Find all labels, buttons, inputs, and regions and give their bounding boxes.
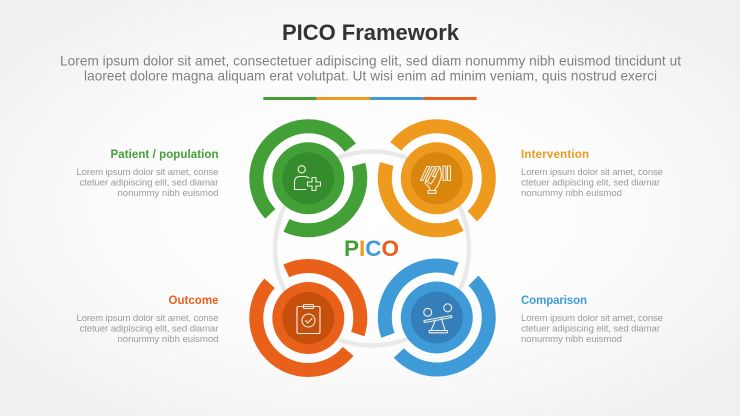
text block: comparison: Lorem ipsum dolor sit amet, conse [521, 313, 663, 324]
text block: intervention: nonummy nibh euismod [521, 188, 622, 199]
panel: patient / population circle [256, 126, 360, 230]
icon: balance scale [424, 304, 452, 333]
text block: patient / population: nonummy nibh euismod [118, 188, 218, 199]
icon: hand with bars [420, 166, 450, 193]
text block: patient / population: ctetuer adipiscing elit, sed diamar [80, 178, 219, 188]
text block: intervention: Intervention [521, 149, 589, 161]
text block: patient / population [76, 149, 219, 199]
subtitle text: Lorem ipsum dolor sit amet, consectetuer adipiscing elit, sed diam nonummy nibh euismod tincidunt ut [60, 54, 681, 68]
text block: comparison: nonummy nibh euismod [521, 334, 622, 345]
center label: PICO: PICO [344, 236, 399, 261]
text block: outcome: nonummy nibh euismod [118, 334, 218, 345]
title: PICO Framework [282, 20, 460, 45]
panel: intervention circle [385, 126, 489, 230]
panel: comparison circle [385, 266, 489, 370]
icon: clipboard with check [297, 304, 320, 334]
text block: patient / population: Patient / population [110, 149, 218, 161]
icon: person with plus [294, 166, 320, 190]
subtitle text [60, 54, 681, 84]
text block: comparison: Comparison [521, 295, 587, 307]
text block: comparison: ctetuer adipiscing elit, sed diamar [521, 324, 661, 334]
four-colour divider [263, 97, 477, 100]
text block: outcome [76, 295, 219, 345]
text block: outcome: Outcome [168, 295, 218, 307]
connecting grey ring [275, 152, 469, 346]
text block: intervention: ctetuer adipiscing elit, sed diamar [521, 178, 661, 188]
subtitle text: laoreet dolore magna aliquam erat volutpat. Ut wisi enim ad minim veniam, quis nostrud exerci [84, 68, 657, 84]
text block: intervention [521, 149, 663, 199]
text block: intervention: Lorem ipsum dolor sit amet, conse [521, 167, 663, 178]
panel: outcome circle [256, 266, 360, 370]
text block: patient / population: Lorem ipsum dolor sit amet, conse [76, 167, 218, 178]
text block: comparison [521, 295, 663, 345]
text block: outcome: ctetuer adipiscing elit, sed diamar [80, 324, 219, 334]
text block: outcome: Lorem ipsum dolor sit amet, conse [76, 313, 218, 324]
